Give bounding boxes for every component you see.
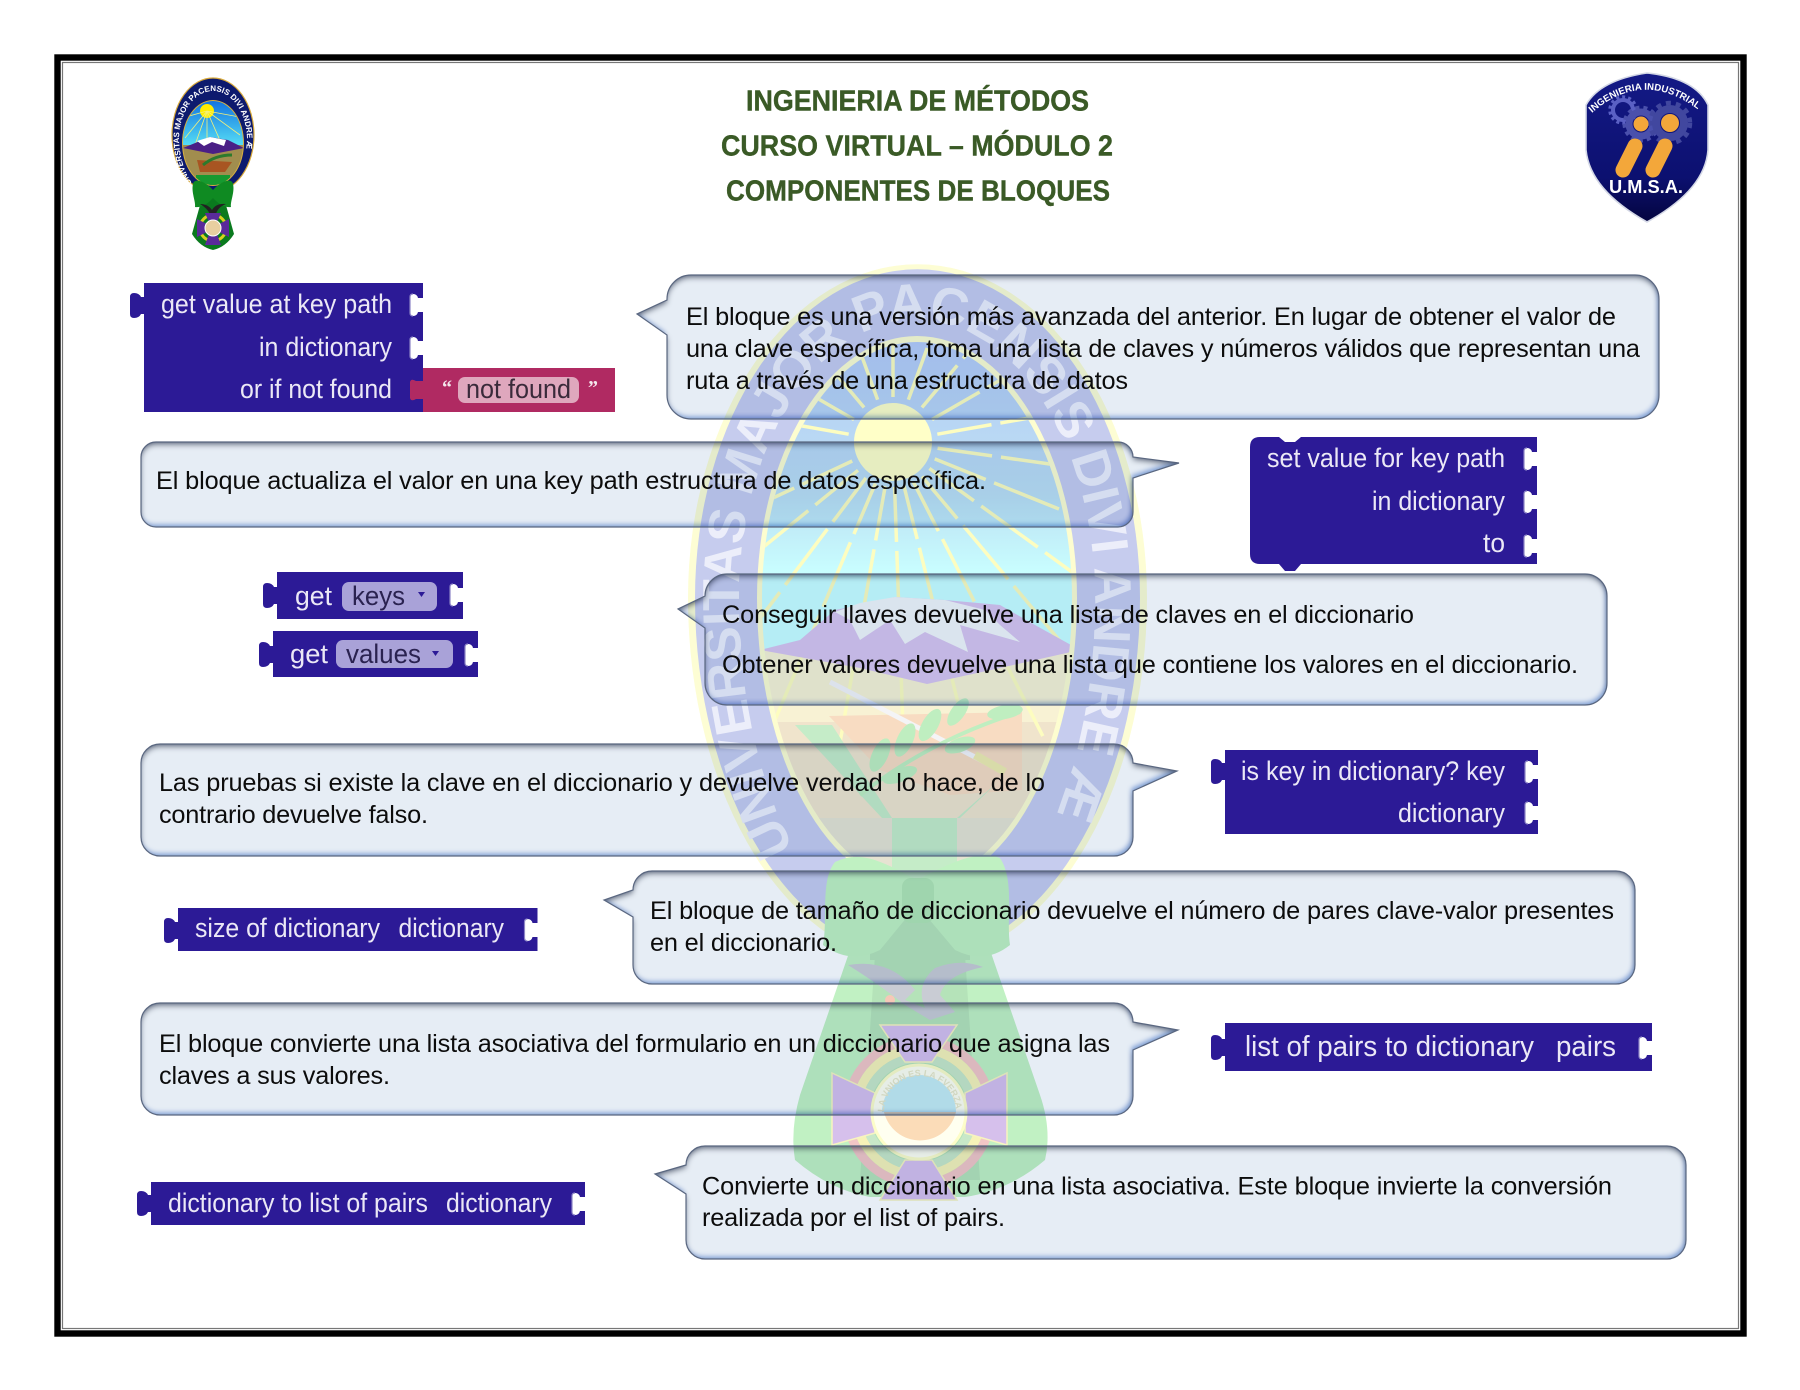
block: get value at key path [130, 283, 615, 412]
block: get keys: get [295, 581, 332, 611]
logo: ingenieria industrial shield [1585, 72, 1709, 223]
block: size of dictionary: dictionary [398, 913, 504, 943]
gears [1610, 97, 1690, 143]
block: get value at key path: or if not found [240, 374, 392, 404]
dropdown: values: values [346, 639, 421, 669]
text: key path description: El bloque es una versión más avanzada del anterior. En lugar de obtener el valor de [686, 303, 1616, 331]
text: is key description: contrario devuelve falso. [159, 801, 428, 829]
block: is key in dictionary: dictionary [1398, 798, 1505, 828]
block: size of dictionary: size of dictionary [195, 913, 380, 943]
block: not found text string: ” [588, 377, 598, 399]
title [721, 86, 1113, 208]
watermark ring lettering: UNIVERSITAS MAJOR PACENSIS DIVI ANDRE Æ [703, 284, 1131, 861]
shield body [1586, 73, 1708, 222]
text: dictionary to list description [702, 1172, 1612, 1232]
block: list of pairs to dictionary [1211, 1023, 1652, 1071]
watermark condor [848, 963, 983, 1020]
text: key path description [686, 303, 1641, 395]
title: COMPONENTES DE BLOQUES [726, 176, 1110, 208]
orange dots and bars [1634, 114, 1679, 132]
block: not found text string: “ [442, 377, 452, 399]
text: is key description: Las pruebas si existe la clave en el diccionario y devuelve verdad lo hace, de lo [159, 769, 1045, 797]
text: list of pairs description: El bloque convierte una lista asociativa del formulario en un diccionario que asigna las [159, 1030, 1110, 1058]
text: keys and values description: Conseguir llaves devuelve una lista de claves en el diccionario [722, 601, 1414, 629]
watermark medal [831, 1024, 1008, 1201]
logo: university seal [171, 77, 255, 250]
dropdown: keys: keys [352, 581, 405, 611]
text: size description [650, 897, 1614, 957]
seal bow [193, 181, 233, 207]
block: not found text string: not found [466, 374, 571, 404]
title: INGENIERIA DE MÉTODOS [746, 86, 1089, 118]
block: dictionary to list of pairs: dictionary to list of pairs [168, 1188, 428, 1218]
block: is key in dictionary: is key in dictionary? key [1241, 756, 1505, 786]
text: size description: El bloque de tamaño de diccionario devuelve el número de pares clave-valor presentes [650, 897, 1614, 925]
text: size description: en el diccionario. [650, 929, 837, 957]
block: size of dictionary [164, 908, 538, 951]
block: get values [259, 631, 478, 677]
dropdown: keys [342, 581, 437, 611]
speech bubble backgrounds [141, 275, 1686, 1259]
text: set key path description: El bloque actualiza el valor en una key path estructura de datos específica. [156, 467, 986, 495]
text: key path description: ruta a través de una estructura de datos [686, 367, 1128, 395]
block: list of pairs to dictionary: pairs [1556, 1031, 1616, 1063]
text: keys and values description [722, 601, 1578, 679]
watermark: university seal [688, 264, 1147, 1201]
shield arc text: INGENIERIA INDUSTRIAL [1588, 83, 1698, 113]
shield initials: U.M.S.A. [1609, 176, 1683, 197]
block: get value at key path: in dictionary [259, 332, 392, 362]
seal oval [172, 78, 254, 192]
text: dictionary to list description: Convierte un diccionario en una lista asociativa. Este bloque invierte la conversión [702, 1172, 1612, 1200]
block: list of pairs to dictionary: list of pairs to dictionary [1245, 1031, 1534, 1063]
block: dictionary to list of pairs [137, 1182, 585, 1225]
text: dictionary to list description: realizada por el list of pairs. [702, 1204, 1005, 1232]
block: get value at key path: get value at key path [161, 289, 392, 319]
seal tails [192, 198, 234, 250]
seal condor [200, 204, 226, 214]
text: keys and values description: Obtener valores devuelve una lista que contiene los valores en el diccionario. [722, 651, 1578, 679]
watermark oval ring [688, 264, 1147, 963]
block: set value for key path: set value for key path [1267, 443, 1505, 473]
speech bubble outlines [141, 275, 1686, 1259]
seal cross [197, 213, 229, 245]
watermark ribbon [793, 855, 1048, 1197]
title: CURSO VIRTUAL – MÓDULO 2 [721, 130, 1113, 162]
block: set value for key path: in dictionary [1372, 486, 1505, 516]
block: dictionary to list of pairs: dictionary [446, 1188, 552, 1218]
text: key path description: una clave específica, toma una lista de claves y números válidos que representan una [686, 335, 1641, 363]
block: get values: get [290, 639, 328, 669]
seal scene [183, 101, 243, 185]
block: not found text string [410, 368, 615, 412]
watermark scene [762, 342, 1072, 878]
block: is key in dictionary [1211, 750, 1538, 834]
seal lettering: UNIVERSITAS MAJOR PACENSIS DIVI ANDRE Æ [173, 86, 252, 184]
text: is key description [159, 769, 1045, 829]
dropdown: values [336, 639, 453, 669]
watermark medal: LA VNION ES LA FVERZA [878, 1070, 962, 1112]
block: get keys [263, 572, 463, 619]
text: list of pairs description: claves a sus valores. [159, 1062, 390, 1090]
text: list of pairs description [159, 1030, 1110, 1090]
block: set value for key path: to [1483, 528, 1505, 558]
block: set value for key path [1250, 437, 1537, 571]
